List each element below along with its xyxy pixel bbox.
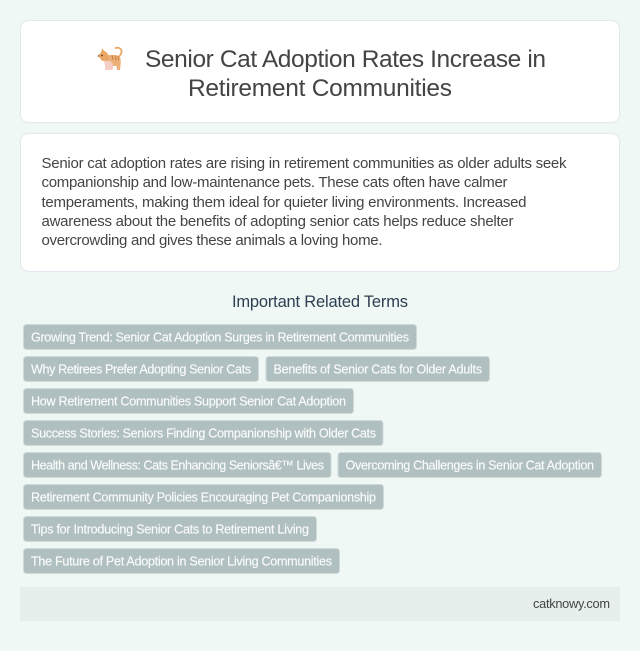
panel: description <box>20 134 620 272</box>
tag: community policies: Retirement Community Policies Encouraging Pet Companionship <box>31 490 376 504</box>
title line 2: Retirement Communities <box>188 75 452 102</box>
tag: health and wellness <box>24 452 331 478</box>
tag: health and wellness: Health and Wellness: Cats Enhancing Seniorsâ€™ Lives <box>31 458 324 472</box>
tag: growing trend <box>24 324 416 350</box>
heading: important related terms: Important Related Terms <box>232 293 408 311</box>
tag: community policies <box>24 484 384 510</box>
tag: community support <box>24 388 354 414</box>
title line 1: Senior Cat Adoption Rates Increase in <box>145 46 546 73</box>
tag: community support: How Retirement Communities Support Senior Cat Adoption <box>31 394 346 408</box>
tag: benefits <box>266 356 490 382</box>
tag: why retirees <box>24 356 258 382</box>
tag: future of adoption <box>24 548 340 574</box>
icon: cat <box>98 48 122 70</box>
tag: introduction tips: Tips for Introducing Senior Cats to Retirement Living <box>31 522 309 536</box>
tag: why retirees: Why Retirees Prefer Adopting Senior Cats <box>31 362 251 376</box>
tag: overcoming challenges <box>338 452 602 478</box>
footer <box>20 587 620 621</box>
tag list <box>24 324 602 574</box>
tag: growing trend: Growing Trend: Senior Cat Adoption Surges in Retirement Communities <box>31 330 409 344</box>
tag: introduction tips <box>24 516 316 542</box>
panel: title card <box>20 20 620 122</box>
tag: benefits: Benefits of Senior Cats for Older Adults <box>274 362 482 376</box>
footer source text: catknowy.com <box>533 596 610 611</box>
description line 2: companionship and low-maintenance pets. These cats often have calmer <box>42 174 508 191</box>
tag: success stories <box>24 420 383 446</box>
tag: future of adoption: The Future of Pet Adoption in Senior Living Communities <box>31 554 332 568</box>
description line 1: Senior cat adoption rates are rising in retirement communities as older adults seek <box>42 155 567 172</box>
tag: success stories: Success Stories: Seniors Finding Companionship with Older Cats <box>31 426 376 440</box>
tag: overcoming challenges: Overcoming Challenges in Senior Cat Adoption <box>346 458 594 472</box>
description line 3: temperaments, making them ideal for quieter living environments. Increased <box>42 194 526 211</box>
description line 4: awareness about the benefits of adopting senior cats helps reduce shelter <box>42 213 514 230</box>
description line 5: overcrowding and gives these animals a loving home. <box>42 232 382 249</box>
